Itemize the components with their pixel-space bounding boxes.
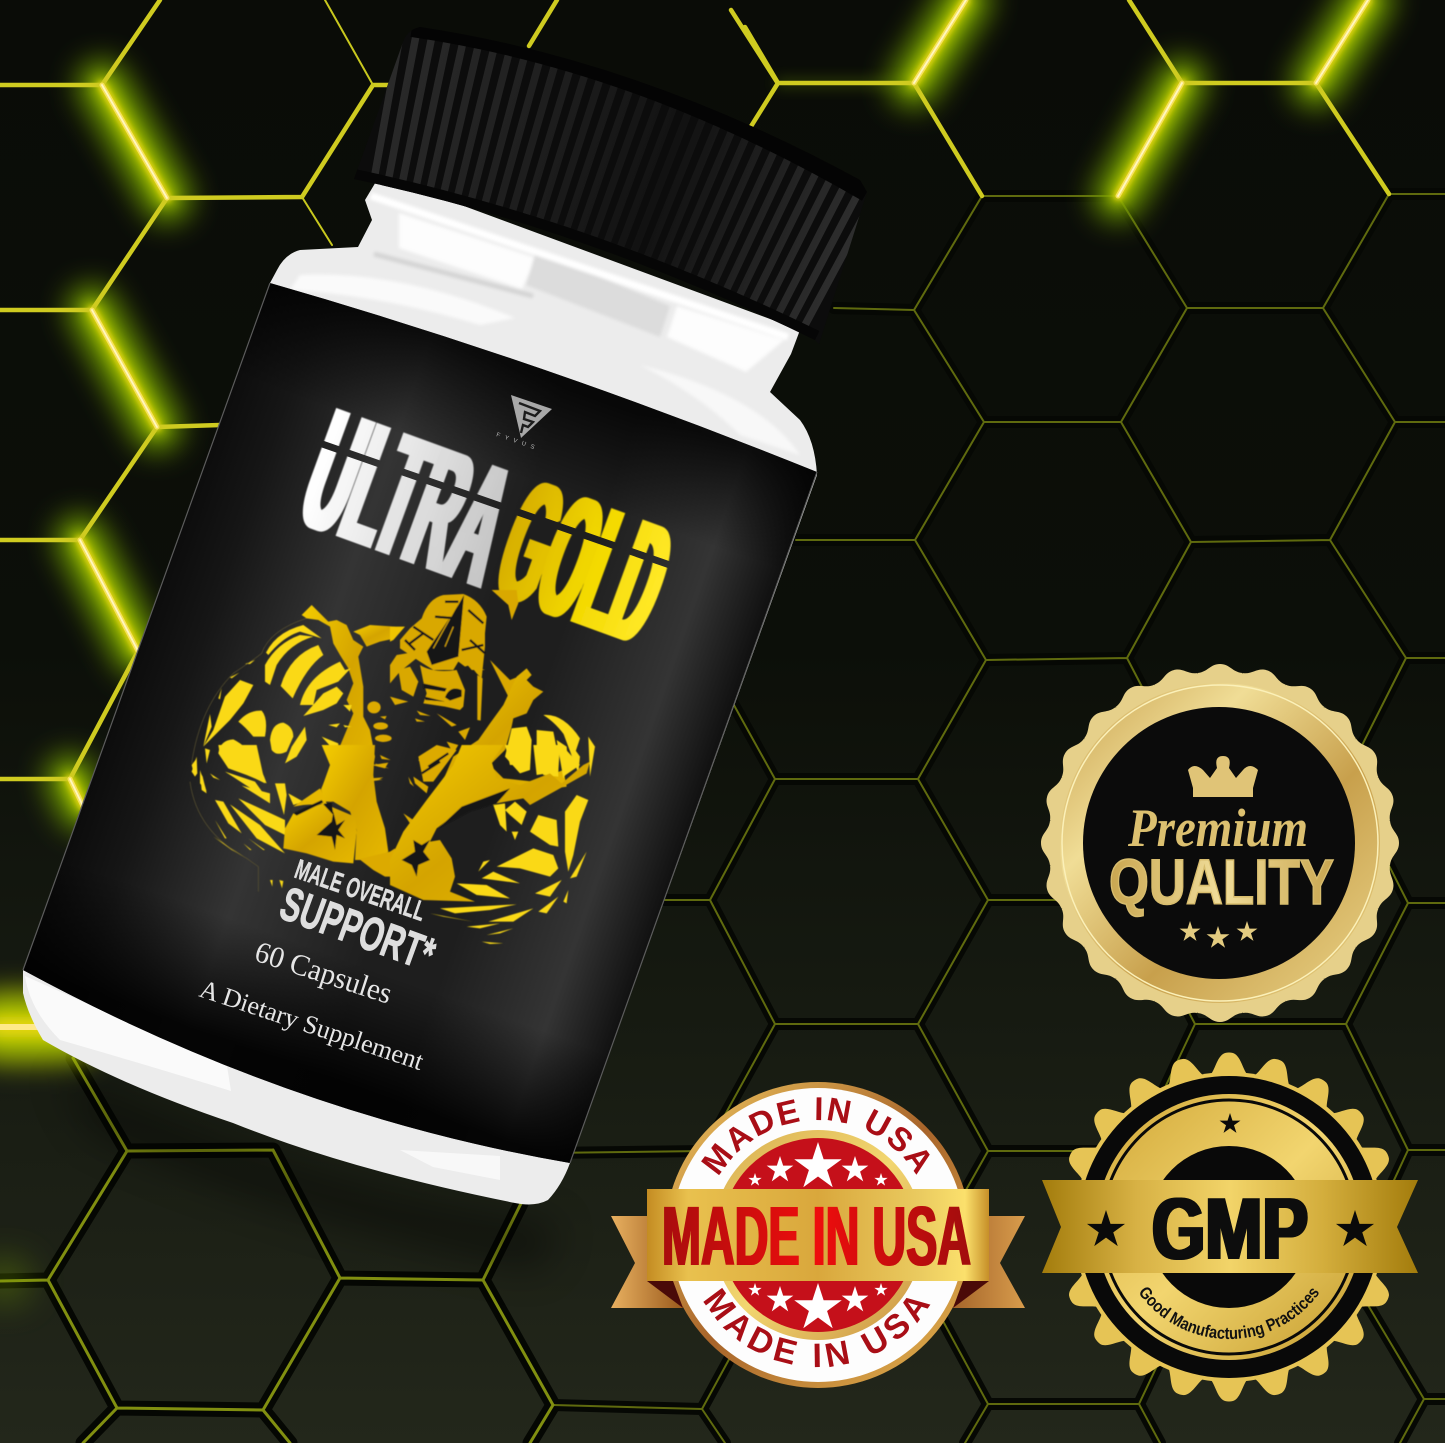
icon: FYVUS logo [495,395,552,453]
icon: crown [1188,756,1258,797]
product name: ULTRA GOLD: ULTRA [282,373,533,624]
ribbon folds [647,1281,989,1308]
ribbon text: MADE IN USA [662,1189,971,1283]
ribbon tails [611,1216,1025,1308]
capacity text: 60 Capsules [251,935,396,1011]
scalloped gold edge [1053,1052,1405,1402]
top arc text: MADE IN USA [701,1097,930,1176]
main ribbon [647,1189,989,1281]
badge: GMP [1042,1052,1418,1402]
badge: made in USA [611,1082,1025,1388]
supplement text: A Dietary Supplement [196,974,428,1076]
product name: ULTRA GOLD [282,373,692,682]
icon: FYVUS logo: FYVUS [495,432,540,453]
bottle [23,27,867,1270]
rhino lower right: forearm sweep and fist [390,745,590,944]
curved practices text: Good Manufacturing Practices [1140,1287,1319,1340]
star above ribbon [1220,1113,1240,1133]
black label [23,283,817,1163]
tagline: MALE OVERALL SUPPORT: MALE OVERALL [291,853,430,927]
bottle shadow [60,1070,560,1270]
badge: premium quality [1041,664,1399,1022]
stars on red disc [748,1142,888,1328]
tagline: MALE OVERALL SUPPORT [273,853,442,982]
fist crack [293,800,345,850]
rhino upper left: shoulder and bicep [192,605,395,795]
gold drip by the ear [492,590,518,620]
tagline: MALE OVERALL SUPPORT: SUPPORT* [273,878,442,982]
three stars [1180,921,1257,948]
scalloped gold edge [1041,664,1399,1022]
rhino head and right shoulder [390,590,595,795]
quality word: QUALITY [1109,846,1334,918]
gold ribbon [1042,1180,1418,1273]
white bottle body [23,175,817,1204]
neck highlights [290,196,800,455]
black cap [354,27,867,344]
bottom arc text: MADE IN USA [703,1288,930,1368]
premium script: Premium [1127,798,1308,858]
rhino illustration [190,590,595,944]
GMP word: GMP [1152,1179,1308,1278]
bottle: GOLD [477,444,692,682]
ribbon stars [1087,1210,1374,1246]
base highlights [25,976,500,1180]
rhino lower left: fist and forearm [190,745,395,892]
